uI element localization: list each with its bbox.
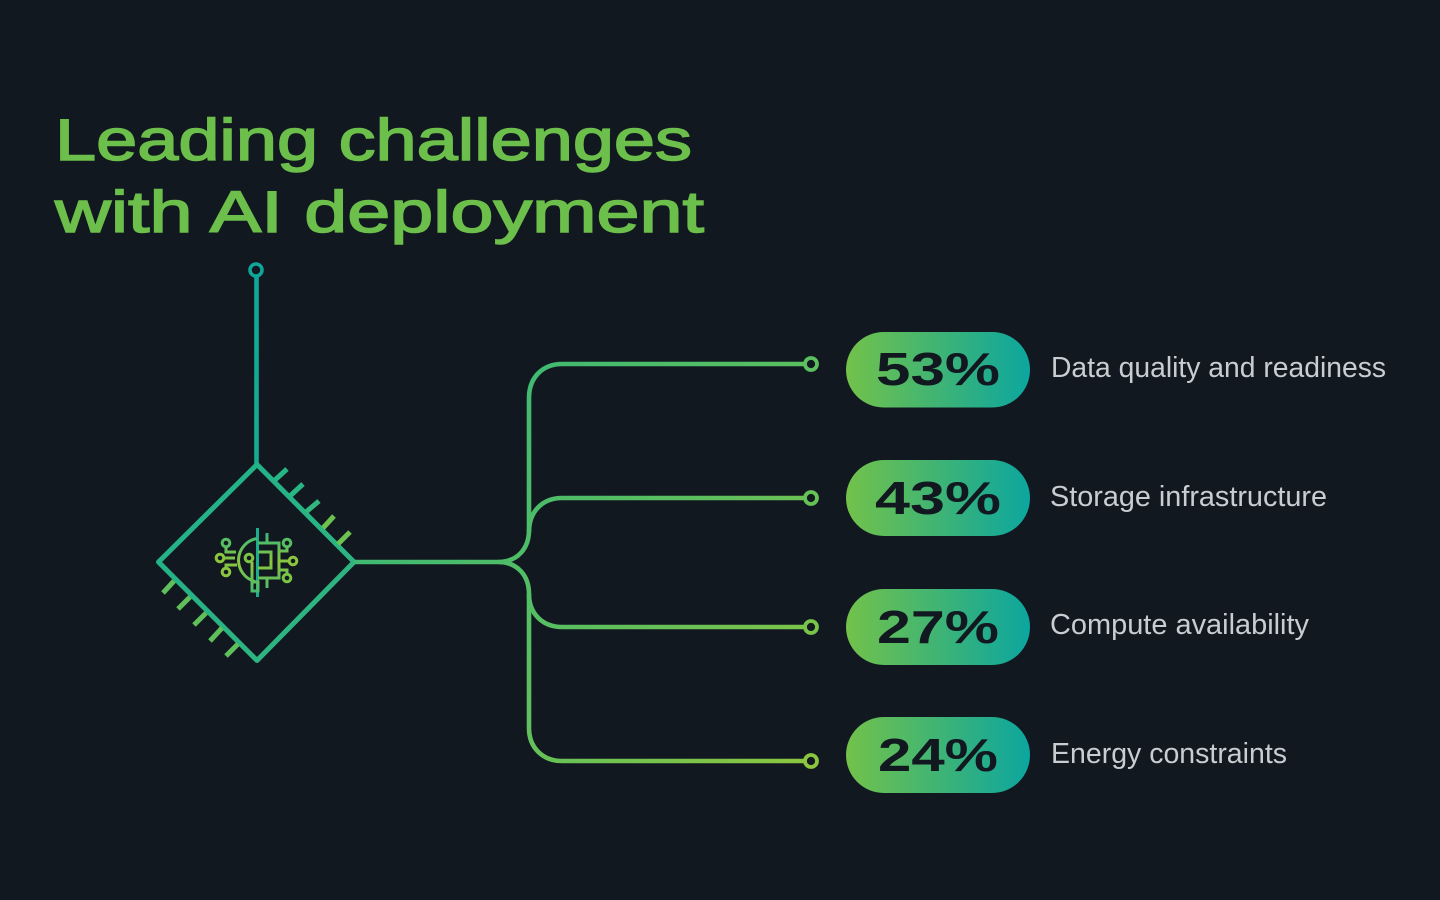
icon: AI circuit chip bbox=[216, 528, 297, 597]
stat row: 53%: Data quality and readiness bbox=[1051, 352, 1386, 384]
stat row: 53% bbox=[846, 332, 1386, 408]
end nodes bbox=[805, 358, 817, 767]
title: with AI deployment bbox=[54, 180, 704, 245]
branching connector lines bbox=[354, 364, 805, 761]
stat row: 43%: 43% bbox=[875, 472, 1001, 524]
title: Leading challenges bbox=[55, 108, 692, 173]
chip pins upper right bbox=[275, 469, 350, 544]
stat row: 53%: 53% bbox=[876, 343, 1000, 395]
stat row: 24%: 24% bbox=[878, 729, 998, 781]
chip diamond outline bbox=[158, 464, 354, 660]
stat row: 24% bbox=[846, 717, 1287, 793]
title bbox=[54, 108, 704, 245]
stat row: 27%: Compute availability bbox=[1050, 609, 1309, 641]
stat row: 27%: 27% bbox=[877, 601, 999, 653]
chip pins lower left bbox=[163, 581, 238, 656]
stem connector with top node bbox=[250, 264, 262, 466]
stat row: 24%: Energy constraints bbox=[1051, 738, 1287, 770]
stat row: 43%: Storage infrastructure bbox=[1050, 481, 1327, 513]
stat row: 27% bbox=[846, 589, 1309, 665]
stat row: 43% bbox=[846, 460, 1327, 536]
